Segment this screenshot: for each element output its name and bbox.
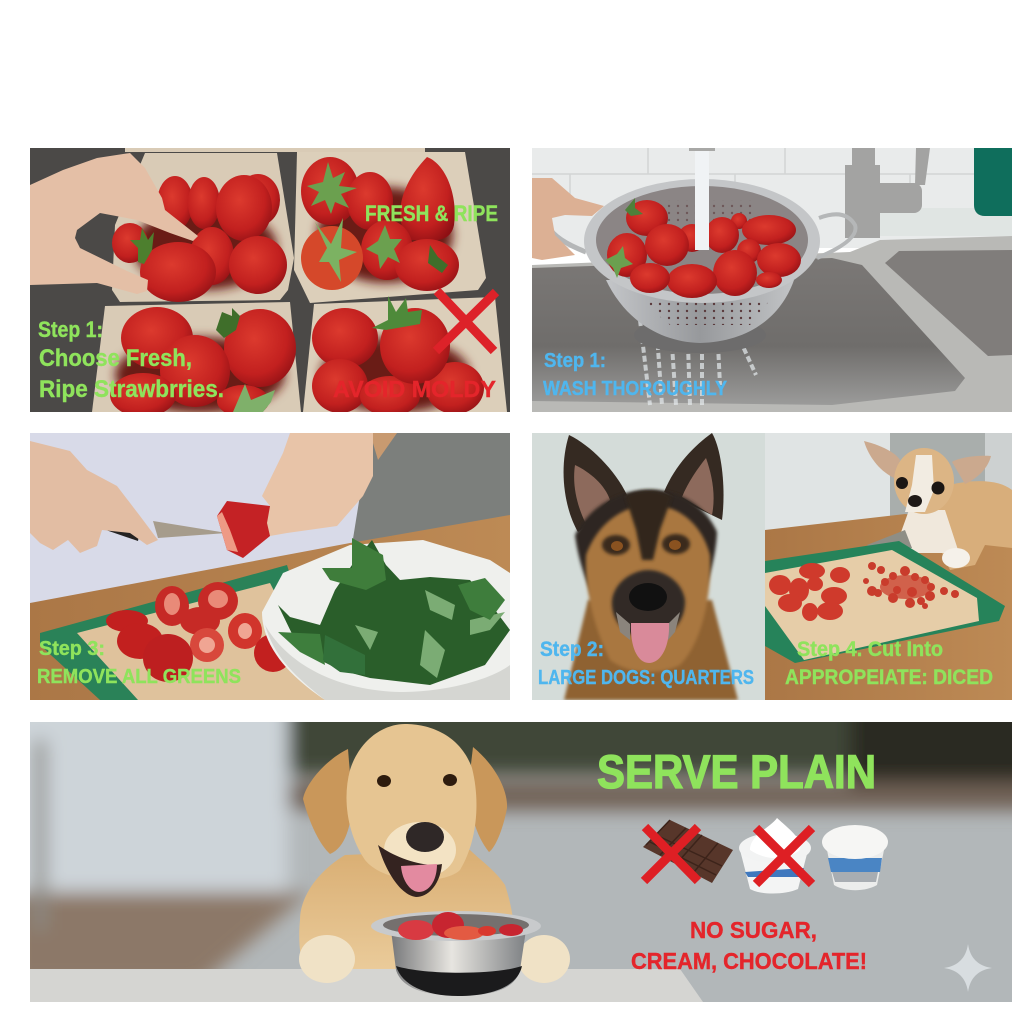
body — [299, 850, 520, 970]
white cabinets — [765, 433, 890, 533]
tile grout — [532, 148, 974, 194]
nose — [908, 495, 922, 507]
basket interior shadows — [115, 187, 470, 413]
text: choose fresh: Choose Fresh, — [39, 345, 192, 372]
bowl outer shade — [265, 625, 510, 700]
green board — [765, 541, 1005, 663]
body — [905, 481, 1012, 570]
golden retriever — [299, 724, 520, 970]
cut strawberry face — [217, 512, 238, 552]
right toothed leaf — [458, 578, 505, 620]
right arm — [370, 433, 397, 460]
grey chin — [616, 612, 680, 640]
colander body — [606, 280, 794, 343]
colander perforations — [650, 302, 768, 325]
right basin — [885, 250, 1012, 356]
pale background — [532, 433, 765, 700]
eyes — [896, 477, 944, 494]
washed strawberries — [605, 198, 801, 298]
bowl of greens — [278, 538, 510, 685]
counter shelf — [879, 208, 1012, 236]
colander base ring — [639, 328, 746, 352]
strawberry leaves — [130, 162, 448, 412]
ears — [303, 749, 352, 854]
running water — [695, 150, 709, 250]
steel bowl — [371, 911, 541, 996]
chihuahua — [864, 441, 1012, 570]
tan face — [586, 505, 710, 672]
text: ripe strawberries: Ripe Strawbrries. — [39, 376, 224, 403]
tiled wall — [532, 148, 1012, 248]
lavender shirt — [30, 433, 370, 612]
ears — [864, 441, 900, 478]
dark head sides — [575, 490, 717, 610]
grey road background — [30, 722, 1012, 1002]
cutting board edge — [40, 565, 330, 700]
board surface — [765, 550, 979, 660]
faucet — [845, 148, 930, 238]
right paw — [942, 548, 970, 568]
dark forehead mask — [625, 490, 672, 560]
colander — [548, 179, 856, 353]
hand picking strawberry — [30, 153, 198, 294]
colander rim — [584, 179, 820, 303]
eyes — [611, 540, 681, 551]
blaze — [905, 455, 934, 512]
text: wash thoroughly: WASH THOROUGHLY — [543, 378, 728, 400]
panel: choose fresh strawberries — [30, 148, 510, 417]
eyes — [377, 774, 457, 787]
panel: remove greens — [30, 433, 510, 700]
strawberry being cut — [217, 501, 270, 558]
teal bottle — [974, 148, 1012, 216]
left broad leaf — [278, 632, 325, 665]
strawberries — [110, 157, 484, 417]
strawberry pieces — [106, 582, 292, 682]
white bowl — [262, 540, 510, 700]
colander interior — [596, 186, 808, 294]
faucet spout — [689, 148, 715, 151]
wooden table — [30, 515, 510, 700]
quartered strawberries — [769, 563, 850, 621]
white chest — [900, 510, 959, 553]
wooden deck background — [30, 148, 510, 412]
colander handles — [817, 214, 856, 258]
red cross — [436, 291, 496, 351]
cutting board surface — [77, 583, 330, 700]
grey wall section — [890, 433, 1012, 523]
panel: small dogs diced — [765, 433, 1012, 700]
heading: serve plain: SERVE PLAIN — [597, 745, 876, 798]
wooden table — [765, 514, 1012, 700]
text: remove all greens: REMOVE ALL GREENS — [37, 666, 241, 688]
text: step 1: Step 1: — [38, 317, 103, 342]
icon: crossed whipped cream cup — [739, 818, 812, 894]
panel: serve plain — [10, 700, 1024, 1002]
sink rim — [532, 236, 1012, 412]
hand holding colander — [532, 178, 604, 260]
text: fresh and ripe: FRESH & RIPE — [365, 201, 498, 226]
mouth — [378, 845, 442, 897]
dog paws — [299, 935, 570, 983]
muzzle — [384, 822, 456, 878]
pale wall right — [985, 433, 1012, 503]
text: step 1: Step 1: — [544, 350, 606, 372]
panel: large dogs quarters — [532, 433, 765, 700]
berry baskets — [92, 148, 507, 412]
text: step 3: Step 3: — [39, 638, 105, 660]
text: cream chocolate: CREAM, CHOCOLATE! — [631, 948, 867, 974]
neck and chest — [564, 600, 738, 700]
lower broad leaf — [323, 635, 365, 675]
head — [894, 448, 954, 514]
upper large leaf — [322, 538, 386, 590]
knife handle — [65, 510, 140, 541]
left hand — [30, 441, 158, 553]
german shepherd — [564, 433, 738, 700]
water splashes — [640, 320, 756, 405]
pale leaves — [420, 630, 445, 678]
ears — [564, 435, 627, 532]
right hand — [262, 433, 373, 536]
inner ears — [574, 465, 610, 522]
head — [346, 724, 476, 880]
nose — [629, 583, 667, 611]
front paw — [867, 530, 912, 552]
text: no sugar: NO SUGAR, — [690, 917, 817, 943]
muzzle — [612, 570, 685, 638]
left basin — [532, 258, 965, 405]
dark eye patches — [602, 534, 690, 555]
text: avoid moldy: AVOID MOLDY — [333, 376, 496, 402]
panel: wash thoroughly — [532, 148, 1012, 412]
blurred backdrop — [10, 700, 1024, 985]
icon: sparkle watermark — [944, 944, 992, 992]
mass of dark leaves — [278, 540, 510, 685]
tongue — [401, 864, 437, 892]
nose — [406, 822, 444, 852]
icon: plain yogurt cup — [822, 825, 888, 890]
text: step 4: Step 4. Cut Into — [797, 638, 943, 661]
text: large dogs quarters: LARGE DOGS: QUARTERS — [538, 667, 754, 689]
text: appropriate diced: APPROPEIATE: DICED — [785, 666, 993, 689]
grey background — [353, 433, 510, 542]
wooden table edge — [30, 969, 703, 1002]
icon: crossed chocolate bar — [643, 820, 733, 883]
knife blade — [153, 521, 227, 538]
text: step 2: Step 2: — [540, 638, 604, 661]
tongue — [631, 623, 669, 663]
inner dimple holes — [660, 200, 755, 222]
diced strawberries — [863, 562, 959, 609]
